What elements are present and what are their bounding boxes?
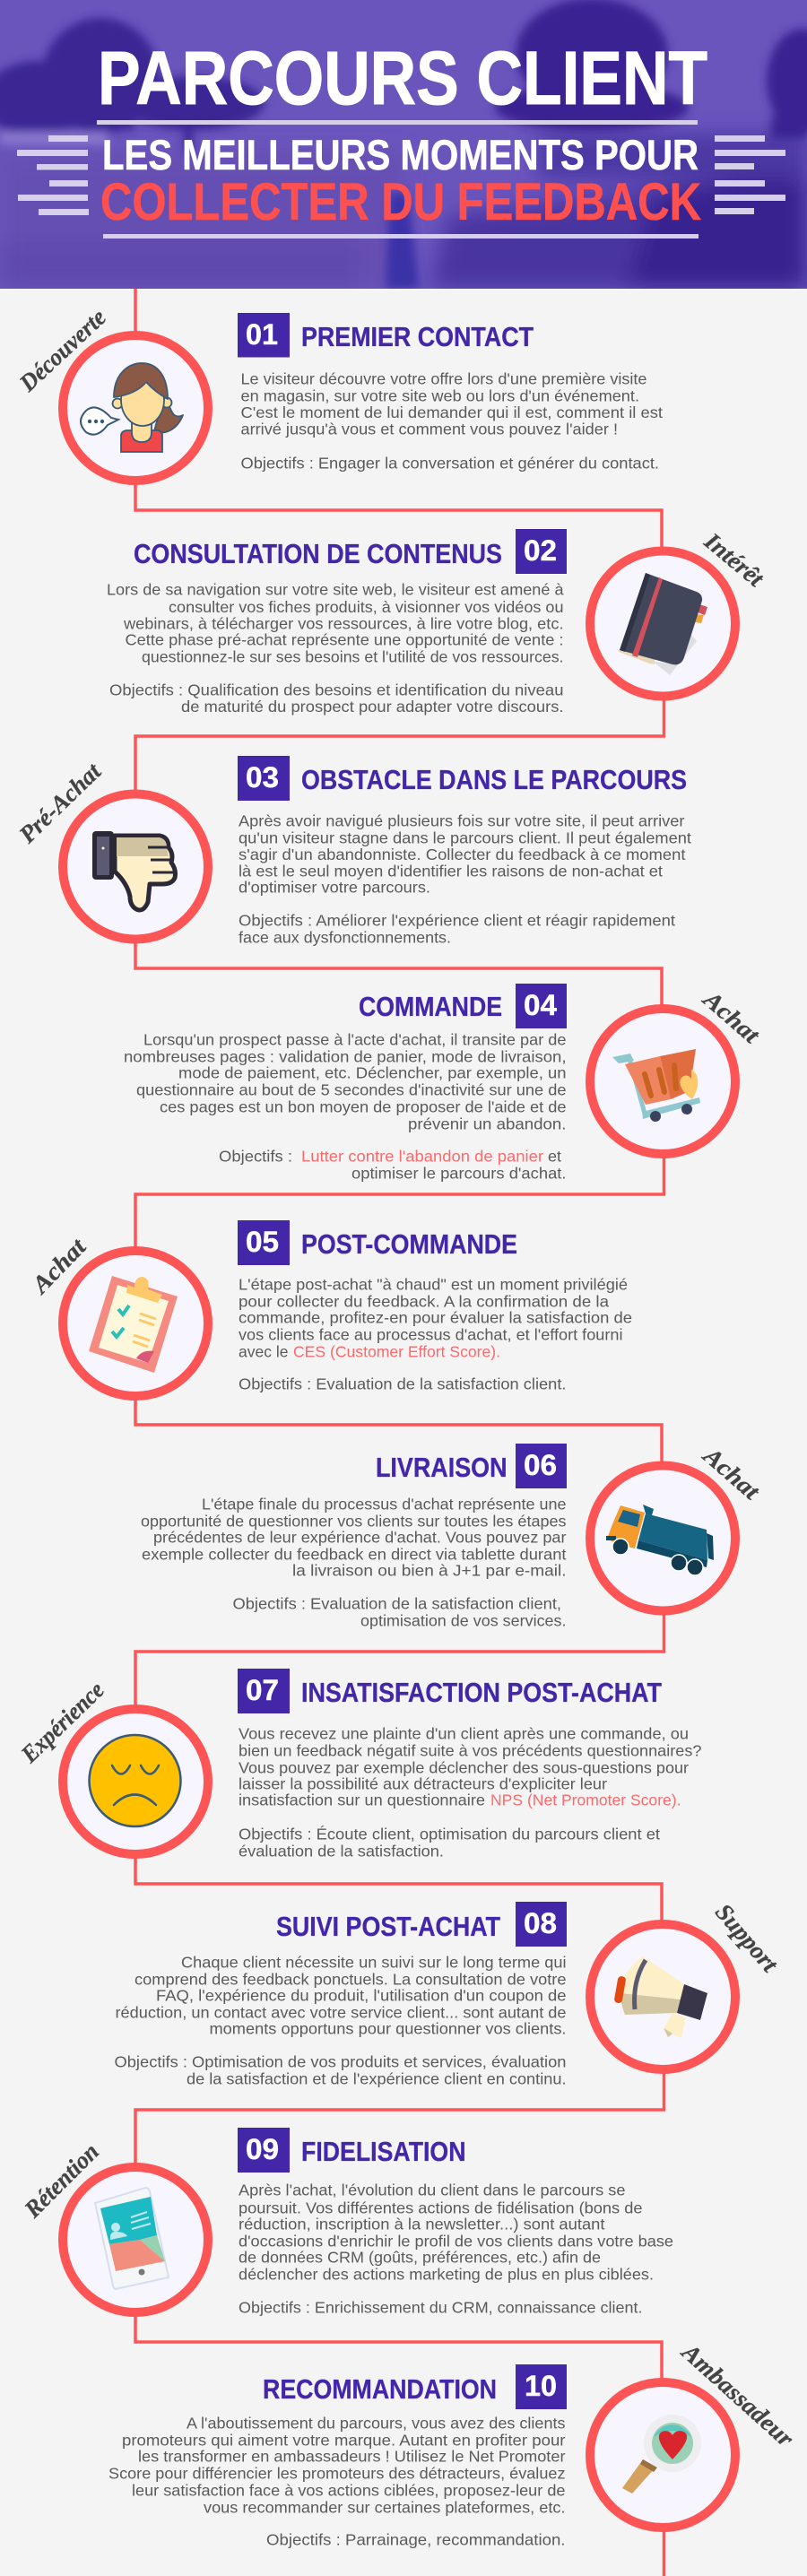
body text: opportunité de questionner vos clients sur toutes les étapes xyxy=(141,1512,567,1530)
heading: POST-COMMANDE xyxy=(301,1228,517,1260)
body text: optimiser le parcours d'achat. xyxy=(351,1164,567,1182)
number badge: 10 xyxy=(525,2370,557,2402)
heading: SUIVI POST-ACHAT xyxy=(276,1911,500,1942)
body text: commande, profitez-en pour évaluer la satisfaction de xyxy=(239,1309,632,1327)
body text: Objectifs : Améliorer l'expérience client et réagir rapidement xyxy=(239,911,675,929)
body text: Le visiteur découvre votre offre lors d'une première visite xyxy=(240,369,647,387)
panel: step 10 recommandation xyxy=(108,2337,799,2548)
body text: leur satisfaction face à vos actions ciblées, proposez-leur de xyxy=(132,2482,565,2500)
top rule xyxy=(97,120,698,125)
body text: Cette phase pré-achat représente une opportunité de vente : xyxy=(126,631,563,649)
body text: questionnez-le sur ses besoins et l'utilité de vos ressources. xyxy=(142,647,563,665)
stage label: Achat: Achat xyxy=(697,1441,766,1505)
body text xyxy=(239,812,691,947)
body text: Lors de sa navigation sur votre site web, le visiteur est amené à xyxy=(107,581,564,599)
body text: Objectifs : Enrichissement du CRM, connaissance client. xyxy=(239,2299,642,2317)
heading: OBSTACLE DANS LE PARCOURS xyxy=(301,764,687,795)
body text: Chaque client nécessite un suivi sur le long terme qui xyxy=(181,1953,567,1971)
icon: notebook xyxy=(590,551,735,696)
body text: prévenir un abandon. xyxy=(408,1115,567,1133)
heading: RECOMMANDATION xyxy=(263,2373,497,2405)
stage label: Pré-Achat: Pré-Achat xyxy=(13,757,107,849)
number badge: 08 xyxy=(524,1907,557,1939)
body text: avec le xyxy=(239,1343,289,1361)
number badge xyxy=(516,2364,567,2409)
heading: FIDELISATION xyxy=(301,2136,466,2167)
body text: moments opportuns pour questionner vos clients. xyxy=(210,2019,567,2037)
body text: la livraison ou bien à J+1 par e-mail. xyxy=(292,1562,567,1580)
number badge xyxy=(516,984,567,1028)
number badge xyxy=(238,313,290,357)
body text: C'est le moment de lui demander qui il est, comment il est xyxy=(240,403,663,421)
icon: truck xyxy=(590,1465,735,1610)
body text: Objectifs : Evaluation de la satisfaction client. xyxy=(239,1375,567,1393)
icon: clipboard xyxy=(63,1251,208,1396)
number badge xyxy=(238,2128,290,2173)
body text xyxy=(141,1496,567,1630)
body text: comprend des feedback ponctuels. La consultation de votre xyxy=(134,1971,567,1989)
number badge: 04 xyxy=(524,989,557,1021)
number badge: 02 xyxy=(524,534,557,567)
body text xyxy=(240,369,663,472)
stage label: Découverte: Découverte xyxy=(13,304,111,397)
body text xyxy=(108,2414,566,2548)
body text: là est le seul moyen d'identifier les raisons de non-achat et xyxy=(239,863,663,880)
icon: megaphone xyxy=(590,1924,735,2069)
body text: mode de paiement, etc. Déclencher, par exemple, un xyxy=(178,1063,567,1081)
body text: qu'un visiteur stagne dans le parcours client. Il peut également xyxy=(239,828,691,846)
body text: Objectifs : Evaluation de la satisfaction client, xyxy=(233,1594,561,1612)
body text: A l'aboutissement du parcours, vous avez des clients xyxy=(187,2414,566,2432)
body text: ces pages est un bon moyen de proposer de l'aide et de xyxy=(160,1097,567,1115)
body text: Lorsqu'un prospect passe à l'acte d'achat, il transite par de xyxy=(143,1031,567,1049)
body text: évaluation de la satisfaction. xyxy=(239,1842,444,1860)
title: parcours client: PARCOURS CLIENT xyxy=(98,36,707,120)
body text: poursuit. Vos différentes actions de fidélisation (bons de xyxy=(239,2199,642,2216)
body text xyxy=(124,1031,567,1182)
panel: step 09 fidelisation xyxy=(19,2128,673,2317)
body text: de maturité du prospect pour adapter votre discours. xyxy=(181,698,563,716)
body text: webinars, à télécharger vos ressources, à lire votre blog, etc. xyxy=(123,615,563,633)
body text: consulter vos fiches produits, à visionner vos vidéos ou xyxy=(169,598,563,616)
heading: CONSULTATION DE CONTENUS xyxy=(134,538,502,569)
panel: step 05 post-commande xyxy=(25,1220,632,1396)
body text: bien un feedback négatif suite à vos précédents questionnaires? xyxy=(239,1741,702,1759)
number badge xyxy=(238,1220,290,1265)
panel: step 02 consultation de contenus xyxy=(107,527,770,716)
panel: step 06 livraison xyxy=(141,1441,766,1630)
icon: woman with speech bubble xyxy=(63,335,208,481)
heading: LIVRAISON xyxy=(376,1452,508,1483)
stage label: Achat: Achat xyxy=(697,984,766,1049)
body text: déclencher des actions marketing de plus en plus ciblées. xyxy=(239,2265,654,2283)
number badge: 06 xyxy=(524,1449,557,1481)
body text: promoteurs qui aiment votre marque. Autant en profiter pour xyxy=(122,2432,566,2450)
body text: précédentes de leur expérience d'achat. Vous pouvez par xyxy=(153,1528,567,1546)
number badge xyxy=(238,1669,290,1713)
stage label: Support: Support xyxy=(710,1898,785,1978)
icon: thumbs down xyxy=(63,794,208,940)
body text xyxy=(239,2181,673,2317)
body text: exemple collecter du feedback en direct via tablette durant xyxy=(142,1546,567,1564)
body text: Après l'achat, l'évolution du client dans le parcours se xyxy=(239,2181,626,2199)
number badge: 05 xyxy=(246,1226,279,1258)
icon: sad face xyxy=(63,1709,208,1854)
body text: laisser la possibilité aux détracteurs d'expliciter leur xyxy=(239,1775,607,1793)
body text xyxy=(239,1275,632,1393)
number badge xyxy=(516,529,567,574)
body text: arrivé jusqu'à vous et comment vous pouvez l'aider ! xyxy=(240,420,618,438)
body text: s'agir d'un abandonniste. Collecter du feedback à ce moment xyxy=(239,846,686,863)
body text: vos clients face au processus d'achat, et l'effort fourni xyxy=(239,1325,622,1343)
stage label: Rétention: Rétention xyxy=(19,2138,104,2224)
body text: NPS (Net Promoter Score). xyxy=(490,1791,681,1809)
body text: Objectifs : Écoute client, optimisation du parcours client et xyxy=(239,1826,660,1843)
number badge: 03 xyxy=(246,761,279,794)
number badge xyxy=(238,756,290,801)
bottom rule xyxy=(103,234,699,239)
body text: pour collecter du feedback. A la confirmation de la xyxy=(239,1293,609,1311)
body text: nombreuses pages : validation de panier, mode de livraison, xyxy=(124,1047,567,1065)
body text: et xyxy=(548,1148,561,1166)
body text xyxy=(239,1725,702,1860)
left decorative bars xyxy=(17,135,89,215)
body text: réduction, inscription à la newsletter...) sont autant xyxy=(239,2215,605,2233)
number badge: 09 xyxy=(246,2133,279,2165)
panel: step 03 obstacle dans le parcours xyxy=(13,756,691,947)
stage label: Expérience: Expérience xyxy=(15,1676,109,1768)
number badge: 01 xyxy=(246,318,278,351)
body text: L'étape finale du processus d'achat représente une xyxy=(202,1496,567,1514)
body text: Objectifs : xyxy=(219,1148,292,1166)
subtitle line 2: COLLECTER DU FEEDBACK xyxy=(100,173,701,231)
stage label: Achat: Achat xyxy=(25,1232,91,1300)
body text: les transformer en ambassadeurs ! Utilisez le Net Promoter xyxy=(138,2448,566,2466)
body text: FAQ, l'expérience du produit, l'utilisation d'un coupon de xyxy=(156,1987,567,2005)
body text xyxy=(107,581,564,716)
journey connector line xyxy=(135,289,664,2576)
stage label: Ambassadeur: Ambassadeur xyxy=(675,2337,799,2452)
body text: Score pour différencier les promoteurs des détracteurs, évaluez xyxy=(108,2464,565,2482)
body text: Objectifs : Qualification des besoins et identification du niveau xyxy=(109,681,563,699)
panel: step 01 premier contact xyxy=(13,304,663,481)
body text: vous recommander sur certaines plateformes, etc. xyxy=(204,2498,565,2516)
header banner xyxy=(0,0,807,289)
heading: COMMANDE xyxy=(359,991,502,1022)
body text: L'étape post-achat "à chaud" est un moment privilégié xyxy=(239,1275,628,1293)
body text: de données CRM (goûts, préférences, etc.) afin de xyxy=(239,2249,601,2267)
body text: en magasin, sur votre site web ou lors d'un événement. xyxy=(240,387,639,405)
body text xyxy=(115,1953,567,2087)
panel: step 04 commande xyxy=(124,984,766,1182)
body text: Lutter contre l'abandon de panier xyxy=(301,1148,543,1166)
body text: face aux dysfonctionnements. xyxy=(239,929,451,947)
heading: PREMIER CONTACT xyxy=(301,321,534,352)
header photo background xyxy=(0,0,807,289)
right decorative bars xyxy=(715,135,785,214)
body text: Objectifs : Parrainage, recommandation. xyxy=(266,2530,565,2548)
body text: Après avoir navigué plusieurs fois sur votre site, il peut arriver xyxy=(239,812,685,830)
body text: insatisfaction sur un questionnaire xyxy=(239,1791,485,1809)
number badge xyxy=(516,1444,567,1488)
icon: magnifier with heart xyxy=(590,2382,735,2528)
body text: CES (Customer Effort Score). xyxy=(293,1343,500,1361)
icon: smartphone xyxy=(63,2167,208,2312)
body text: Objectifs : Engager la conversation et générer du contact. xyxy=(240,454,659,472)
panel: step 08 suivi post-achat xyxy=(115,1898,785,2087)
body text: optimisation de vos services. xyxy=(360,1612,567,1630)
body text: Objectifs : Optimisation de vos produits et services, évaluation xyxy=(115,2053,567,2071)
number badge: 07 xyxy=(246,1674,279,1706)
subtitle line 1: LES MEILLEURS MOMENTS POUR xyxy=(102,131,699,178)
stage label: Intérêt: Intérêt xyxy=(699,527,770,593)
icon: shopping cart xyxy=(590,1009,735,1154)
body text: d'occasions d'enrichir le profil de vos clients dans votre base xyxy=(239,2233,673,2251)
body text: réduction, un contact avec votre service client... sont autant de xyxy=(115,2003,567,2021)
panel: step 07 insatisfaction post-achat xyxy=(15,1669,702,1860)
body text: questionnaire au bout de 5 secondes d'inactivité sur une de xyxy=(136,1081,567,1099)
body text: Vous pouvez par exemple déclencher des sous-questions pour xyxy=(239,1759,689,1777)
heading: INSATISFACTION POST-ACHAT xyxy=(301,1677,662,1708)
body text: d'optimiser votre parcours. xyxy=(239,879,430,897)
body text: Vous recevez une plainte d'un client après une commande, ou xyxy=(239,1725,689,1743)
number badge xyxy=(516,1902,567,1947)
body text: de la satisfaction et de l'expérience client en continu. xyxy=(187,2069,567,2087)
